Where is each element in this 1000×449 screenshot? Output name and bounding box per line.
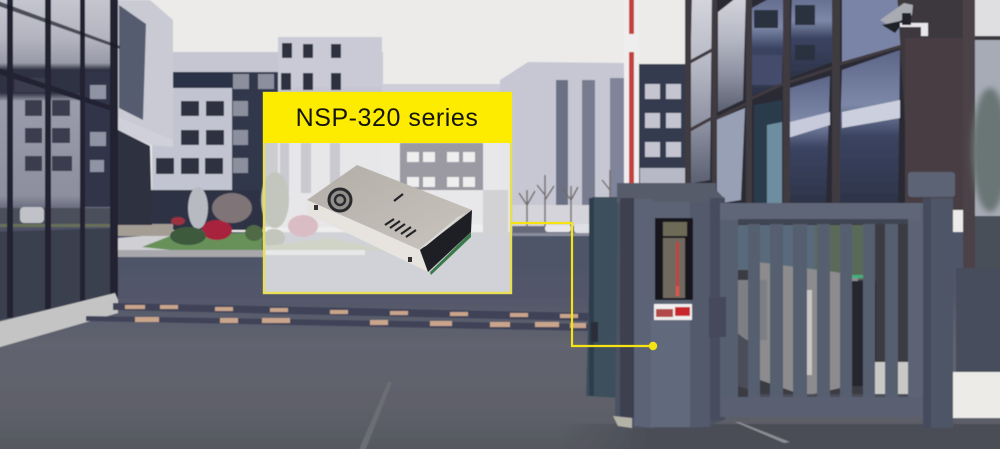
callout panel: translucent box xyxy=(261,92,512,293)
building: centre-right offices xyxy=(500,62,685,230)
connector end dot xyxy=(649,342,657,350)
trees and cars in the distance xyxy=(512,170,622,236)
faded building behind the callout xyxy=(261,143,508,255)
heading band xyxy=(263,92,512,143)
gate post with motor housing xyxy=(908,172,955,428)
background: road and asphalt xyxy=(0,232,1000,449)
garden island with shrubs xyxy=(118,187,264,257)
right glass building xyxy=(685,0,1000,206)
pedestrian gate frame xyxy=(709,203,932,417)
ground under gate xyxy=(560,424,1000,449)
control post with display xyxy=(613,183,725,428)
building column xyxy=(897,0,973,206)
building: left white block xyxy=(117,0,173,225)
green cabinet behind bollard xyxy=(586,197,620,398)
left glass curtain wall xyxy=(0,0,120,322)
icon: security camera xyxy=(880,3,928,36)
connector line from callout to post xyxy=(511,223,657,350)
post display xyxy=(655,218,693,300)
road markings xyxy=(355,382,392,449)
far right glass xyxy=(945,0,1000,418)
product: power supply xyxy=(307,165,472,275)
post label sticker xyxy=(654,304,692,320)
speed bumps xyxy=(86,303,590,331)
background: sky xyxy=(0,0,1000,240)
inside of pedestrian gate background xyxy=(730,206,920,406)
heading band: NSP-320 series xyxy=(296,104,478,132)
left building concrete base xyxy=(0,293,118,350)
barrier arm xyxy=(624,0,639,184)
building: centre-left offices xyxy=(118,37,507,230)
